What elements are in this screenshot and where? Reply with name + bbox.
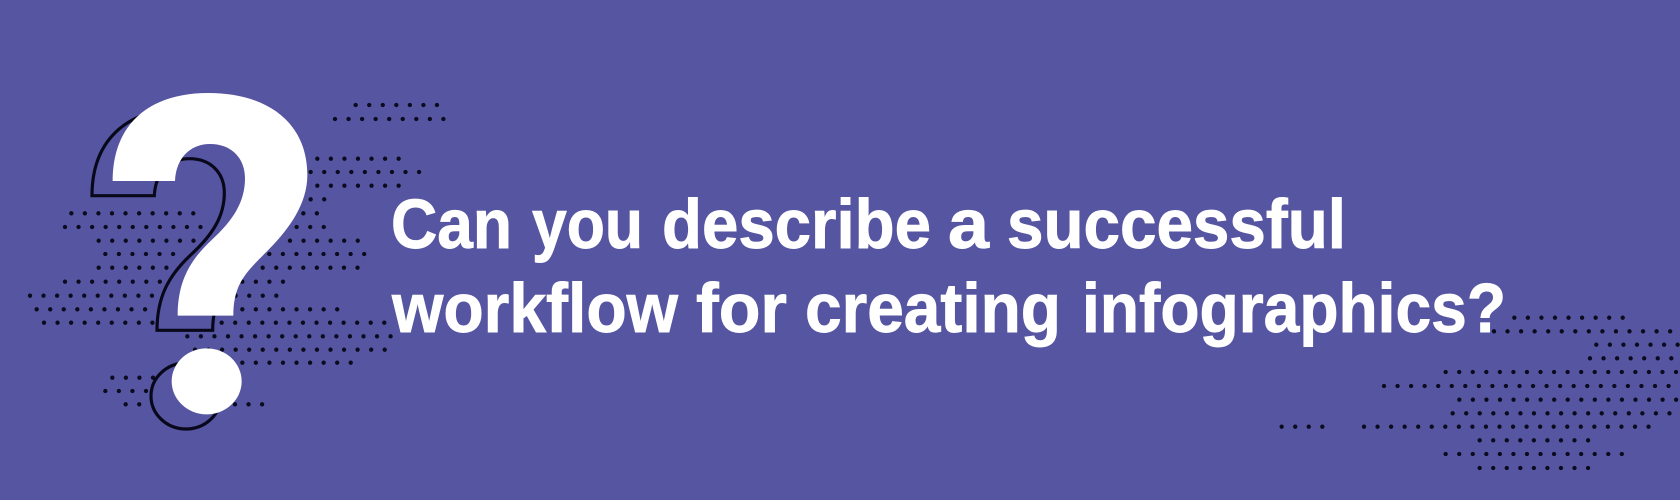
halftone dots: left cluster bbox=[30, 105, 445, 404]
title: infographics? bbox=[1082, 269, 1506, 347]
title: workflow bbox=[391, 269, 679, 347]
title: for bbox=[696, 269, 787, 347]
halftone dots: right cluster bbox=[1282, 318, 1679, 468]
title: you bbox=[532, 185, 643, 263]
question mark white glyph bbox=[113, 93, 307, 414]
title bbox=[391, 185, 1506, 347]
question mark black outline shadow bbox=[92, 108, 287, 429]
title: a bbox=[948, 185, 990, 263]
title: successful bbox=[1007, 185, 1346, 263]
title: describe bbox=[662, 185, 931, 263]
title: creating bbox=[805, 269, 1061, 347]
title: Can bbox=[391, 185, 512, 263]
icon: question mark bbox=[92, 93, 307, 429]
